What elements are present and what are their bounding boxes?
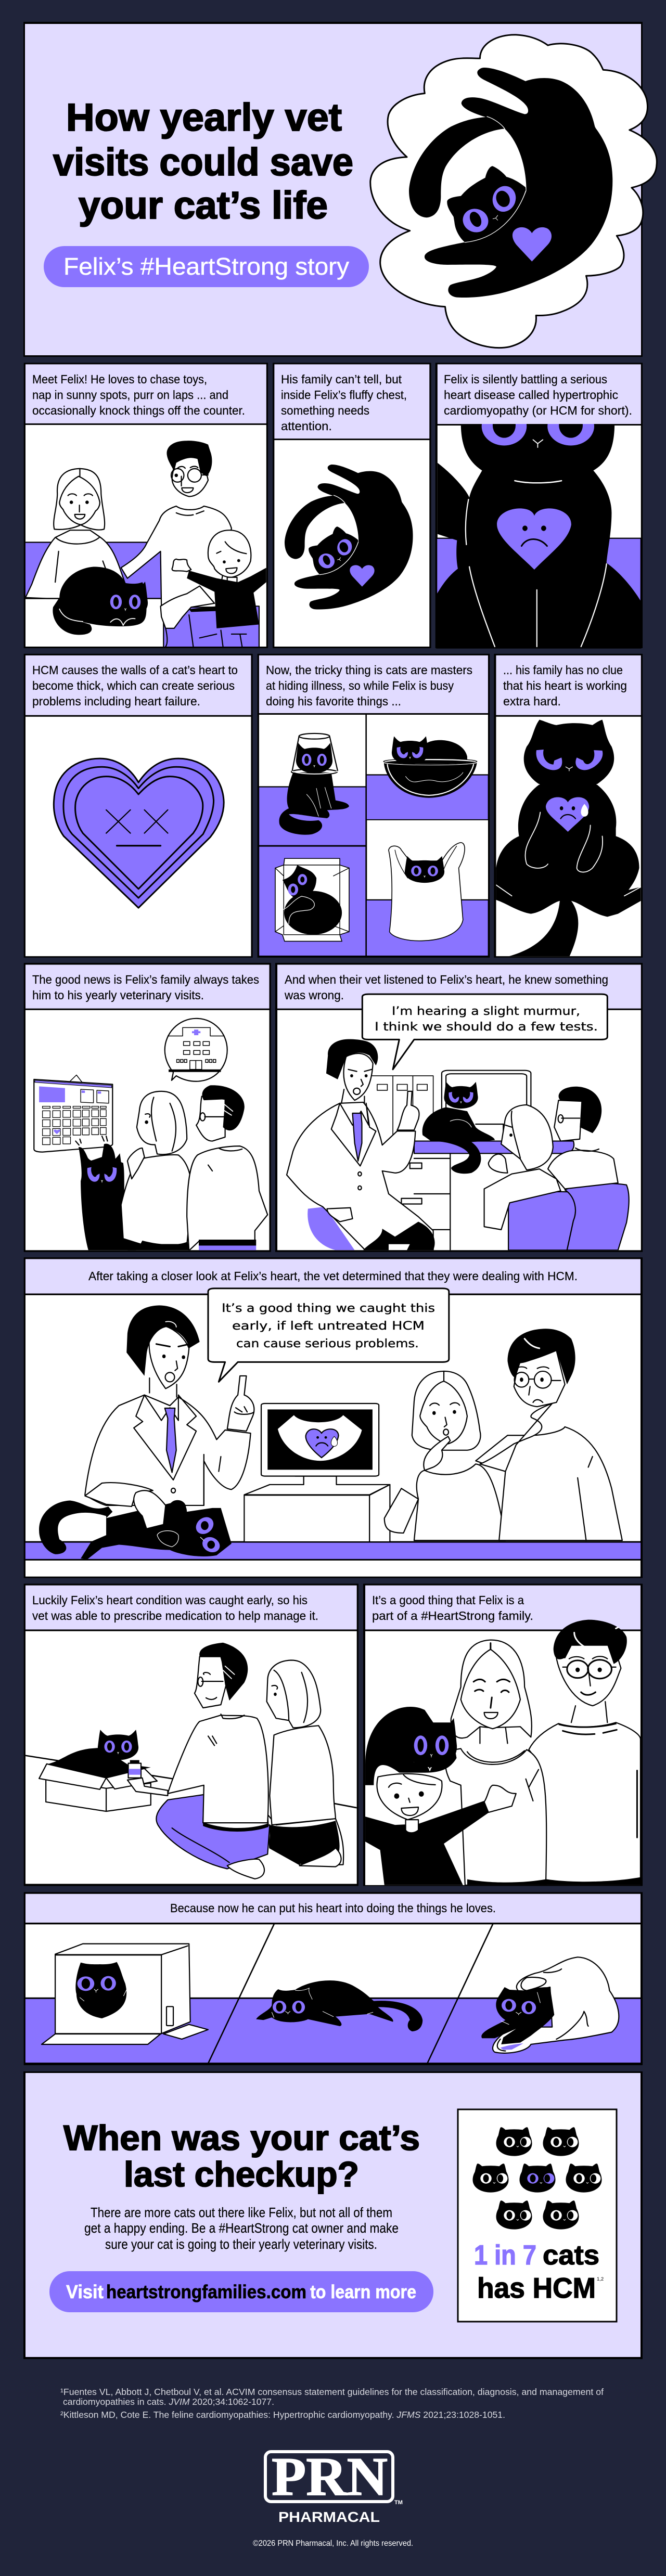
caption text: good news: The good news is Felix’s family always takes bbox=[32, 973, 259, 986]
caption text: meet Felix: nap in sunny spots, purr on laps ... and bbox=[32, 388, 228, 402]
illustration: happy family with Felix on boy's head bbox=[365, 1620, 641, 1885]
caption text: family can't tell bbox=[281, 372, 407, 433]
call to action pill: heartstrongfamilies.com bbox=[106, 2281, 306, 2302]
speech text: caught early: It’s a good thing we caught this bbox=[222, 1302, 435, 1315]
illustration: Felix in a bag bbox=[389, 843, 465, 941]
body text: get a happy ending. Be a #HeartStrong cat owner and make bbox=[84, 2220, 399, 2236]
heading bbox=[63, 2118, 420, 2194]
illustration: Felix in a bowl bbox=[391, 740, 467, 763]
panel: last checkup call to action bbox=[23, 2071, 643, 2359]
icon: seven cat faces bbox=[472, 2127, 601, 2230]
illustration: floor bar bbox=[24, 1542, 642, 1560]
speech text: slight murmur bbox=[375, 1005, 598, 1034]
panel: things he loves bbox=[24, 1892, 643, 2065]
caption text: HCM causes: HCM causes the walls of a cat’s heart to bbox=[32, 663, 238, 677]
caption text: silently battling: cardiomyopathy (or HCM for short). bbox=[444, 404, 632, 417]
panel: yearly vet visits row bbox=[24, 963, 643, 1252]
speech text: caught early: early, if left untreated HCM bbox=[232, 1320, 425, 1333]
illustration: Felix curled with heart bbox=[409, 68, 612, 298]
illustration: thickened heart with x eyes bbox=[54, 758, 224, 908]
speech text: caught early: can cause serious problems. bbox=[236, 1337, 419, 1350]
panel: vet determined HCM bbox=[24, 1257, 643, 1578]
caption text: HeartStrong family: part of a #HeartStrong family. bbox=[372, 1609, 533, 1622]
caption text: tricky thing: doing his favorite things ... bbox=[266, 694, 401, 708]
illustration: Felix on boy's head face bbox=[406, 1718, 457, 1767]
caption text: good news bbox=[32, 973, 259, 1002]
speech bubble: caught early bbox=[208, 1289, 449, 1382]
caption text: closer look: After taking a closer look at Felix’s heart, the vet determined that they were dealing with HCM. bbox=[88, 1269, 578, 1283]
illustration: Felix upside down with heart bbox=[285, 465, 413, 610]
caption text: family can't tell: something needs bbox=[281, 404, 369, 417]
caption text: vet listened bbox=[284, 973, 608, 1002]
caption text: HCM causes: problems including heart failure. bbox=[32, 694, 200, 708]
illustration: Felix on the counter face bbox=[103, 582, 148, 618]
caption text: family can't tell: His family can’t tell, but bbox=[281, 372, 402, 386]
caption text: no clue: that his heart is working bbox=[503, 679, 627, 692]
caption text: vet listened: was wrong. bbox=[284, 988, 344, 1002]
caption text: tricky thing: at hiding illness, so while Felix is busy bbox=[266, 679, 454, 692]
illustration: calendar, hospital thought, family and Felix bbox=[34, 1019, 267, 1251]
illustration: Felix with tearful heart bbox=[496, 720, 641, 957]
illustration: vet pointing bbox=[85, 1305, 254, 1505]
illustration: cat face in bag bbox=[405, 856, 444, 883]
body text bbox=[84, 2205, 399, 2252]
illustration: Felix in a box bbox=[275, 858, 349, 941]
caption text: HeartStrong family bbox=[372, 1593, 533, 1622]
caption text: silently battling bbox=[444, 372, 632, 417]
illustration: woman thinking bbox=[385, 1371, 505, 1540]
copyright: ©2026 PRN Pharmacal, Inc. All rights reserved. bbox=[253, 2539, 413, 2548]
stat text: cats bbox=[543, 2240, 599, 2271]
call to action pill: to learn more bbox=[310, 2281, 416, 2302]
caption text: HCM causes bbox=[32, 663, 238, 708]
stat text bbox=[474, 2240, 604, 2304]
caption text: things he loves: Because now he can put his heart into doing the things he loves. bbox=[170, 1901, 496, 1915]
speech bubble: slight murmur bbox=[362, 994, 607, 1070]
panel: title hero bbox=[23, 22, 657, 357]
illustration: Felix in box face bbox=[98, 1730, 138, 1760]
caption text: caught early: Luckily Felix’s heart condition was caught early, so his bbox=[32, 1593, 308, 1607]
panel: HCM explanation row bbox=[24, 654, 643, 958]
caption text: HeartStrong family: It’s a good thing that Felix is a bbox=[372, 1593, 524, 1607]
stat text: 1 in 7 bbox=[474, 2240, 536, 2271]
caption text: meet Felix: Meet Felix! He loves to chase toys, bbox=[32, 372, 207, 386]
illustration: dream cloud bbox=[370, 35, 657, 348]
illustration: cat face in glass bbox=[296, 743, 332, 774]
panel: silently battling bbox=[436, 363, 643, 648]
illustration: Felix on vet table face bbox=[444, 1082, 478, 1109]
footnotes bbox=[60, 2387, 604, 2420]
caption text: family can't tell: attention. bbox=[281, 419, 332, 433]
speech text: slight murmur: I think we should do a few tests. bbox=[375, 1021, 598, 1034]
illustration: cat face in bowl bbox=[392, 736, 428, 764]
caption text: vet listened: And when their vet listened to Felix’s heart, he knew something bbox=[285, 973, 608, 986]
caption text: no clue: ... his family has no clue bbox=[503, 663, 623, 677]
footnotes: ¹Fuentes VL, Abbott J, Chetboul V, et al. ACVIM consensus statement guidelines for the classification, diagnosis, and management of bbox=[60, 2387, 604, 2397]
caption text: caught early bbox=[32, 1593, 318, 1622]
panel: meet Felix bbox=[24, 363, 643, 650]
caption text: family can't tell: inside Felix’s fluffy chest, bbox=[281, 388, 407, 402]
footnotes: ²Kittleson MD, Cote E. The feline cardiomyopathies: Hypertrophic cardiomyopathy. JFMS 2021;23:1028-1051. bbox=[60, 2410, 505, 2420]
logo: PRN Pharmacal bbox=[265, 2446, 403, 2525]
caption text: silently battling: heart disease called hypertrophic bbox=[444, 388, 618, 402]
illustration: vet with family and Felix bbox=[287, 1039, 629, 1250]
illustration: Felix stretching bbox=[256, 1980, 422, 2031]
panel: medication and family row bbox=[24, 1583, 643, 1886]
illustration: family with Felix bbox=[24, 441, 266, 650]
speech text: caught early bbox=[222, 1302, 435, 1350]
caption text: tricky thing: Now, the tricky thing is cats are masters bbox=[266, 663, 472, 677]
subtitle pill: Felix’s #HeartStrong story bbox=[63, 253, 349, 280]
footnotes: cardiomyopathies in cats. JVIM 2020;34:1062-1077. bbox=[63, 2397, 274, 2407]
caption text: caught early: vet was able to prescribe medication to help manage it. bbox=[32, 1609, 318, 1622]
heading: last checkup? bbox=[124, 2155, 359, 2194]
illustration: monitor showing heart bbox=[244, 1403, 390, 1542]
illustration: Felix in a plastic bag bbox=[481, 1957, 619, 2053]
heading: When was your cat’s bbox=[63, 2118, 420, 2158]
title bbox=[53, 96, 353, 227]
illustration: Felix on exam table bbox=[39, 1483, 232, 1560]
illustration: Felix under a glass bbox=[279, 772, 349, 835]
caption text: good news: him to his yearly veterinary visits. bbox=[32, 988, 204, 1002]
body text: sure your cat is going to their yearly veterinary visits. bbox=[105, 2236, 377, 2252]
call to action pill: Visit bbox=[66, 2281, 104, 2302]
illustration: couple giving Felix medication bbox=[25, 1643, 357, 1879]
stat text: 1,2 bbox=[597, 2276, 604, 2282]
call to action pill bbox=[49, 2271, 433, 2312]
stat box: 1 in 7 cats bbox=[458, 2109, 617, 2322]
logo: PRN Pharmacal: PRN bbox=[272, 2446, 388, 2507]
caption text: no clue bbox=[503, 663, 627, 708]
caption text: meet Felix bbox=[32, 372, 245, 417]
title: visits could save bbox=[53, 140, 353, 184]
logo: PRN Pharmacal: PHARMACAL bbox=[278, 2509, 380, 2525]
illustration: Felix in cardboard box bbox=[42, 1944, 208, 2044]
caption text: meet Felix: occasionally knock things off the counter. bbox=[32, 404, 245, 417]
caption text: silently battling: Felix is silently battling a serious bbox=[444, 372, 607, 386]
subtitle pill bbox=[44, 246, 369, 287]
panel: cats hiding illness bbox=[258, 654, 490, 958]
body text: There are more cats out there like Felix, but not all of them bbox=[91, 2205, 392, 2220]
panel: family has no clue bbox=[494, 654, 643, 958]
caption text: tricky thing bbox=[266, 663, 472, 708]
title: How yearly vet bbox=[66, 96, 342, 139]
illustration: man thinking bbox=[476, 1329, 622, 1540]
caption text: HCM causes: become thick, which can create serious bbox=[32, 679, 235, 692]
stat text: has HCM bbox=[477, 2272, 596, 2304]
panel: family can't tell bbox=[273, 363, 431, 648]
illustration: giant sad Felix bbox=[437, 407, 641, 648]
speech text: slight murmur: I’m hearing a slight murmur, bbox=[392, 1005, 580, 1018]
logo: PRN Pharmacal: TM bbox=[394, 2500, 403, 2506]
caption text: no clue: extra hard. bbox=[503, 694, 561, 708]
illustration: Felix at calendar face bbox=[82, 1153, 122, 1190]
title: your cat’s life bbox=[79, 184, 328, 227]
